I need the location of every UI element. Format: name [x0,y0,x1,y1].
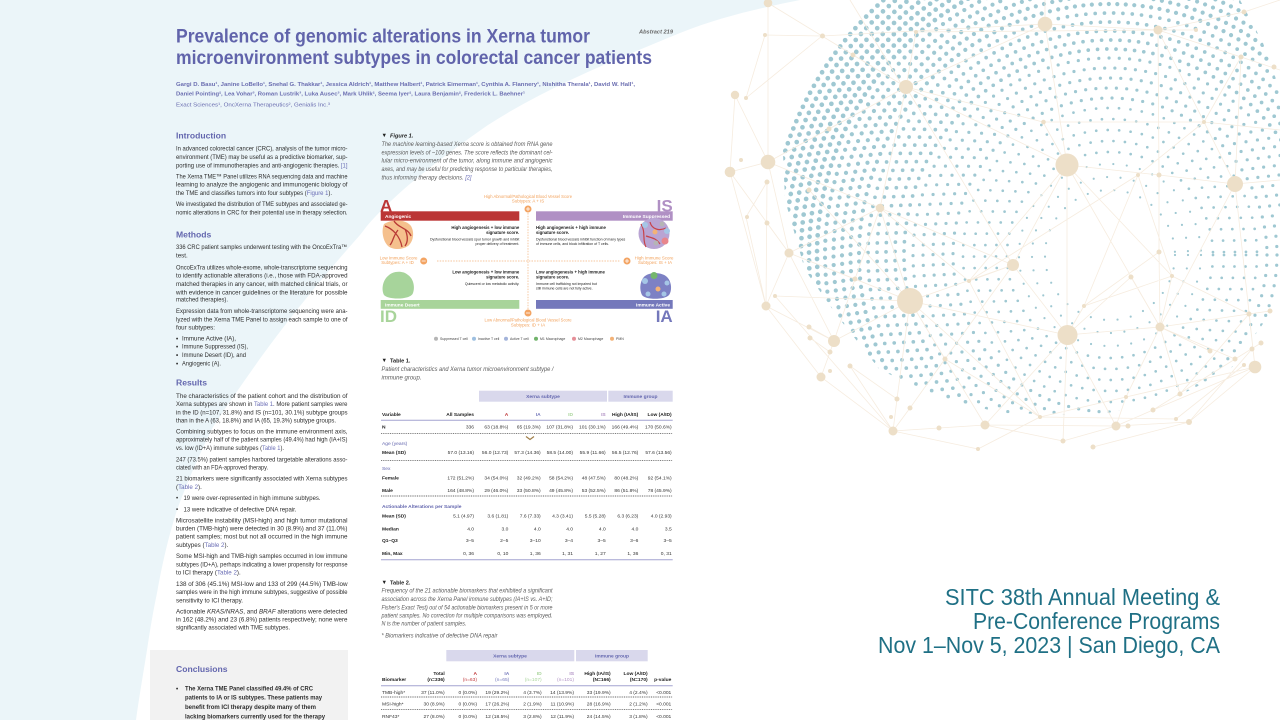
axis labels: Subtypes: A + IS [512,198,544,204]
section: results: 21 biomarkers were significantly associated with Xerna subtypes [176,476,348,483]
table 2: p-value [654,677,672,683]
table 1: 3–5 [466,538,474,544]
teal dot field [783,0,1280,414]
figure 1 caption: expression levels of ~100 genes. The score reflects the dominant cel- [382,150,552,156]
quadrant IS: immune suppressed: signature score. [536,230,569,235]
conference info: Nov 1–Nov 5, 2023 | San Diego, CA [878,632,1221,658]
section: methods: Immune Desert (ID), and [182,352,247,359]
table 1: IA [536,412,541,418]
quadrant A: angiogenic: High angiogenesis + low immune [451,225,520,230]
table 2: 2 (1.2%) [629,702,648,708]
table 2: 17 (26.2%) [485,702,510,708]
table 1: N [382,424,386,430]
section: results [176,378,348,632]
table 1: 55.9 (11.66) [580,450,606,456]
section: methods: four subtypes: [176,324,215,331]
table 2: 12 (11.9%) [550,714,574,720]
table 1: 170 (50.6%) [645,424,672,430]
table 2: 3 (1.8%) [629,714,648,720]
table 1: Immune group [624,394,657,400]
table 1: 1, 31 [562,551,573,557]
table 2 caption: Frequency of the 21 actionable biomarkers that exhibited a significant [382,588,553,594]
table 1: Age (years) [382,441,408,447]
table 1: Male [382,488,393,494]
legend [434,337,624,341]
table 2: IA [504,671,510,677]
quadrant ID: immune desert: Immune Desert [385,302,420,308]
quadrant IA: immune active: Immune Active [636,302,670,308]
panel: conclusions: • [176,685,178,692]
quadrant A: angiogenic: proper delivery of treatment. [476,242,519,246]
table 1: A [505,412,509,418]
figure 1 caption: axes, and may be useful for predicting response to particular therapies, [382,167,552,173]
table 2 caption: patient samples. No correction for multiple comparisons was employed. [381,613,552,619]
section: methods: Methods [176,230,212,240]
table 2: RNF43* [382,714,399,720]
section: results: samples were in the high immune subtypes, suggestive of possible [176,589,348,596]
table 1: IS [601,412,606,418]
table 1: 58.5 (14.00) [547,450,573,456]
table 1 caption: Patient characteristics and Xerna tumor microenvironment subtype / [382,367,555,373]
table 1: Mean (SD) [382,514,406,520]
quadrant A: angiogenic: signature score. [486,230,519,235]
section: introduction: porting use of immunotherapies and anti-angiogenic therapies. [1] [176,163,348,170]
section: methods: Immune Suppressed (IS), [182,344,248,351]
section: results: (Table 2). [176,484,202,491]
quadrant IA: immune active: still immune cells are not fully active. [536,286,593,290]
table 1: 80 (48.2%) [614,476,639,482]
quadrant A: angiogenic: A [380,196,392,216]
section: introduction: environment (TME) may be useful as a predictive biomarker, sup- [176,154,348,161]
table 1: 3–6 [630,538,639,544]
table 1: 3–10 [530,538,541,544]
table 2: TMB-high* [382,690,405,696]
table 2: 28 (16.9%) [587,702,611,708]
table 2: 4 (3.7%) [523,690,542,696]
table 1: 164 (48.8%) [447,488,474,494]
table 1: 3–5 [664,538,672,544]
figure 1: quadrant diagram [380,194,674,341]
section: results: ciated with an FDA-approved therapy. [176,465,268,472]
quadrant ID: immune desert: signature score. [486,274,519,279]
table 1 caption [382,358,555,382]
background: pale blue curved shape [0,0,800,720]
table 1: 3–4 [565,538,573,544]
section: results: 13 were indicative of defective DNA repair. [184,506,297,513]
table 1: 65 (19.3%) [517,424,541,430]
table 2: Biomarker [382,677,406,683]
figure 1 caption: lular micro-environment of the tumor, along immune and angiogenic [382,159,552,165]
quadrant IS: immune suppressed: Immune Suppressed [623,214,670,220]
section: methods: • [176,335,178,342]
table 2: IS [569,671,575,677]
table 1: All Samples [446,412,474,418]
section: methods: with evidence in cancer guidelines or the literature for possible [175,290,348,297]
table 2: 24 (14.5%) [587,714,611,720]
table 2 caption: * Biomarkers indicative of defective DNA repair [382,633,498,639]
section: methods: 336 CRC patient samples underwent testing with the OncoExTra™ [176,244,347,251]
axis labels [380,194,674,328]
conference info: Pre-Conference Programs [973,608,1220,634]
table 1: 53 (52.5%) [582,488,606,494]
legend: M2 Macrophage [578,337,603,341]
table 2: Low (A/ID) [624,671,648,677]
table 1: 56.0 (12.73) [482,450,509,456]
table 2: A [473,671,477,677]
authors: Daniel Pointing², Lea Vohar³, Roman Lustrik³, Luka Ausec³, Mark Uhlik², Seema Iyer², Laura Benjamin², Frederick L. Baehner¹ [176,90,525,98]
table 1: Xerna subtype [526,394,560,400]
table 2 caption: association across the Xerna Panel immune subtypes (IA+IS vs. A+ID; [382,597,553,603]
table 1: 86 (51.8%) [614,488,639,494]
conference info [878,584,1221,658]
section: methods: lyzed with the Xerna TME Panel to assign each sample to one of [176,316,348,323]
section: results: in the ID (n=107, 31.8%) and IS (n=101, 30.1%) subtype groups [176,409,348,416]
section: methods: matched therapies in any cancer, with matched clinical trials, or [176,281,348,288]
quadrant IS: immune suppressed [536,196,673,249]
axis labels: Subtypes: IS + IA [638,260,672,265]
section: results: vs. low (ID+A) immune subtypes (Table 1). [176,445,284,452]
title: Prevalence of genomic alterations in Xerna tumor [176,26,591,48]
table 2: 0 (0.0%) [459,690,477,696]
table 2: 11 (10.9%) [550,702,574,708]
table 1: 5.5 (5.28) [585,514,606,520]
table 1: 0, 36 [463,551,474,557]
figure 1 caption: ▼ [382,133,387,139]
section: results: Some MSI-high and TMB-high samples occurred in low immune [176,553,348,560]
table 1: High (IA/IS) [612,412,639,418]
section: methods: Expression data from whole-transcriptome sequencing were ana- [176,308,348,315]
section: introduction: learning to analyze the angiogenic and immunogenic biology of [176,182,348,189]
title [176,26,652,69]
table 1: 34 (54.0%) [484,476,509,482]
quadrant IS: immune suppressed: of immune cells, and block infiltration of T cells. [536,242,609,246]
section: results: subtypes (ID+A), perhaps indicating a lower propensity for response [176,561,348,568]
axis labels: Low Abnormal/Pathological Blood Vessel Score [484,318,572,322]
table 2: 30 (8.9%) [423,702,445,708]
table 2: 14 (13.9%) [550,690,574,696]
quadrant IA: immune active: Low angiogenesis + high immune [536,270,605,274]
quadrant IA: immune active [536,270,673,326]
table 1: 3.5 [665,526,672,532]
table 2: High (IA/IS) [584,671,611,677]
legend: Active T cell [510,337,529,341]
table 2: (n=107) [525,677,542,683]
table 2: MSI-high* [382,702,404,708]
section: methods: • [176,360,178,367]
table 2: 0 (0.0%) [459,714,477,720]
axis labels: Subtypes: A + ID [381,260,414,265]
section: methods [175,230,348,367]
section: introduction [176,130,348,217]
axis labels: Subtypes: ID + IA [511,322,545,328]
table 2: (n=336) [427,677,445,683]
table 1: Q1–Q3 [382,538,398,544]
table 1: 107 (31.8%) [546,424,573,430]
table 2 caption: N is the number of patient samples. [382,622,466,628]
authors: Gargi D. Basu¹, Janine LoBello¹, Snehal G. Thakkar¹, Jessica Aldrich¹, Matthew Halbert¹, Patrick Eimerman¹, Cynthia A. Flannery¹, Nishitha Therala¹, David W. Hall¹, [176,81,635,88]
table 1: 0, 10 [497,551,509,557]
figure 1 caption: Figure 1. [390,134,414,140]
figure 1 caption: thus informing therapy decisions. [2] [382,175,472,181]
section: introduction: We investigated the distribution of TME subtypes and associated ge- [176,201,348,208]
section: results: • [176,495,178,502]
table 2: Xerna subtype [493,654,527,660]
table 1: 3.6 (1.81) [487,514,509,520]
legend: Inactive T cell [478,337,499,341]
table 1: Variable [382,412,401,418]
table 2: Total [433,671,445,677]
table 1: 57.3 (14.36) [514,450,541,456]
table 1: 1, 36 [530,551,541,557]
table 1: Median [382,526,399,532]
quadrant IA: immune active: signature score. [536,274,569,279]
section: methods: test. [176,253,188,260]
section: results: than in the A (63, 18.8%) and IA (65, 19.3%) subtype groups. [176,418,336,425]
quadrant ID: immune desert: ID [380,307,397,326]
table 1: 7.6 (7.33) [520,514,541,520]
section: results: burden (TMB-high) were detected in 30 (8.9%) and 37 (11.0%) [176,526,348,533]
table 2: (n=65) [495,677,510,683]
table 1: 4.0 [534,526,541,532]
panel: conclusions: patients to IA or IS subtypes. These patients may [185,695,323,702]
section: results: in 162 (48.2%) and 23 (6.8%) patients respectively; none were [176,617,348,624]
decorative network globe [724,0,1280,451]
table 1: 78 (45.9%) [648,488,672,494]
section: introduction: The Xerna TME™ Panel utilizes RNA sequencing data and machine [176,174,348,181]
network edges [730,0,1280,449]
table 2: (N=170) [630,677,648,683]
table 1 caption: ▼ [382,358,387,364]
table 1: 4.0 [631,526,639,532]
section: results: Microsatellite instability (MSI-high) and high tumor mutational [176,517,348,524]
table 2 caption: Table 2. [390,580,411,586]
table 1: Mean (SD) [382,450,406,456]
legend: M1 Macrophage [540,337,565,341]
table 1: 56.5 (12.76) [612,450,639,456]
table 2: 4 (2.4%) [629,690,648,696]
table 1: 4.0 [566,526,573,532]
table 1: Female [382,476,399,482]
table 1: 49 (45.8%) [549,488,573,494]
table 2: <0.001 [656,702,672,708]
panel: conclusions: Conclusions [176,664,228,674]
section: introduction: In advanced colorectal cancer (CRC), analysis of the tumor micro- [176,146,348,153]
quadrant ID: immune desert [380,270,520,326]
section: introduction: Introduction [176,130,226,140]
table 1: 1, 27 [595,551,606,557]
section: results: • [176,506,178,513]
quadrant ID: immune desert: Low angiogenesis + low immune [452,270,520,274]
table 1: 336 [466,424,474,430]
quadrant IS: immune suppressed: High angiogenesis + high immune [536,225,606,230]
title: microenvironment subtypes in colorectal cancer patients [176,48,652,69]
table 2: (N=166) [593,677,611,683]
table 2: 0 (0.0%) [459,702,477,708]
table 1 caption: immune group. [382,376,422,382]
table 2: (n=63) [463,677,477,683]
table 2: ID [537,671,542,677]
section: results: 138 of 306 (45.1%) MSI-low and 133 of 299 (44.5%) TMB-low [176,581,348,588]
table 2: Immune group [595,654,629,660]
section: results: Actionable KRAS/NRAS, and BRAF alterations were detected [176,608,348,615]
axis labels: High Immune Score [635,256,674,260]
poster content [150,26,674,720]
section: results: The characteristics of the patient cohort and the distribution of [176,393,348,400]
panel: conclusions [150,650,348,720]
table 1: 1, 36 [627,551,639,557]
table 1: Low (A/ID) [648,412,672,418]
table 2: 33 (19.9%) [587,690,611,696]
table 2 [381,650,673,720]
section: results: 19 were over-represented in high immune subtypes. [184,495,321,502]
section: results: Combining subtypes to focus on the immune environment axis, [176,429,348,436]
table 1: 166 (49.4%) [612,424,639,430]
table 1: 33 (50.8%) [517,488,541,494]
table 2: 3 (2.8%) [523,714,542,720]
panel: conclusions: The Xerna TME Panel classified 49.4% of CRC [185,685,314,692]
section: introduction: the TME and classifies tumors into four subtypes (Figure 1). [176,190,332,197]
figure 1 caption [382,133,553,181]
table 2: 19 (29.2%) [485,690,510,696]
table 1: 4.0 (2.93) [651,514,672,520]
quadrant A: angiogenic: Angiogenic [385,214,411,220]
table 1: 58 (54.2%) [549,476,573,482]
table 1: 4.0 [599,526,606,532]
table 2: 27 (8.0%) [423,714,445,720]
table 1: Min, Max [382,551,403,557]
section: results: to ICI therapy (Table 2). [176,570,241,577]
table 1: 4.3 (3.41) [552,514,573,520]
section: methods: • [176,344,178,351]
table 1: 92 (54.1%) [648,476,672,482]
table 1: 57.6 (13.56) [645,450,672,456]
section: results: 247 (73.5%) patient samples harbored targetable alterations asso- [176,456,348,463]
table 1: 3.0 [501,526,509,532]
table 1: 48 (47.5%) [582,476,606,482]
legend: PMN [616,337,624,341]
quadrant IS: immune suppressed: IS [657,196,673,216]
axis labels: High Abnormal/Pathological Blood Vessel Score [484,194,573,199]
section: introduction: nomic alterations in CRC for their potential use in therapy selection. [176,210,348,217]
section: results: sensitivity to ICI therapy. [176,597,243,604]
table 1: 32 (49.2%) [517,476,541,482]
panel: conclusions: benefit from ICI therapy despite many of them [185,704,316,711]
table 1: 6.3 (6.23) [617,514,639,520]
table 1 [381,391,673,560]
section: methods: Immune Active (IA), [182,335,236,342]
table 1: 29 (46.0%) [484,488,509,494]
table 1: 172 (51.2%) [447,476,474,482]
quadrant IA: immune active: Immune cell trafficking not impaired but [536,282,597,286]
table 1: 57.0 (13.16) [448,450,474,456]
section: results: Results [176,378,207,388]
section: results: significantly associated with TME subtypes. [176,625,290,632]
table 2: <0.001 [656,690,672,696]
quadrant A: angiogenic [380,196,520,249]
table 2 caption: ▼ [382,580,387,586]
section: methods: matched therapies). [176,297,228,304]
table 1: ID [568,412,573,418]
table 1: 0, 31 [661,551,672,557]
conference info: SITC 38th Annual Meeting & [945,584,1220,610]
table 1: 5.1 (4.97) [453,514,474,520]
table 2: (n=101) [557,677,574,683]
section: results: Xerna subtypes are shown in Table 1. More patient samples were [176,401,348,408]
section: methods: to identify actionable alterations (i.e., those with FDA-approved [176,272,348,279]
quadrant A: angiogenic: Dysfunctional blood vessels spur tumor growth and inhibit [430,238,519,242]
quadrant ID: immune desert: Quiescent or low metabolic activity. [465,282,519,286]
authors: Exact Sciences¹, OncXerna Therapeutics², Genialis Inc.³ [176,102,330,108]
table 2: 12 (18.5%) [485,714,510,720]
legend: Suppressed T cell [440,337,468,341]
section: methods: • [176,352,178,359]
table 2: 37 (11.0%) [421,690,445,696]
table 1: Actionable Alterations per Sample [382,504,462,510]
table 1: 4.0 [467,526,474,532]
authors [176,81,635,108]
section: results: subtypes (Table 2). [176,542,229,549]
table 2: 2 (1.9%) [523,702,542,708]
section: methods: OncoExTra utilizes whole-exome, whole-transcriptome sequencing [176,264,348,271]
section: results: patient samples; most but not all occurred in the high immune [176,534,348,541]
axis arrows [420,206,630,316]
section: results: approximately half of the patient samples (49.4%) had high (IA+IS) [176,437,348,444]
table 1 caption: Table 1. [390,358,411,364]
table 2 caption: Fisher's Exact Test) out of 54 actionable biomarkers present in 5 or more [382,605,553,611]
table 1: 101 (30.1%) [579,424,606,430]
quadrant IS: immune suppressed: Dysfunctional blood vessels inhibit function of many types [536,238,626,242]
table 2: <0.001 [656,714,672,720]
table 2 caption [381,580,553,639]
section: methods: Angiogenic (A). [182,360,221,367]
table 1: Sex [382,466,391,472]
table 1: 63 (18.8%) [484,424,509,430]
table 1: 3–5 [598,538,606,544]
quadrant IA: immune active: IA [656,307,673,326]
table 1: 2–5 [500,538,509,544]
figure 1 caption: The machine learning-based Xerna score is obtained from RNA gene [382,142,553,148]
network nodes [725,0,1276,451]
abstract number: Abstract 219 [638,30,674,36]
axis labels: Low Immune Score [380,256,418,260]
